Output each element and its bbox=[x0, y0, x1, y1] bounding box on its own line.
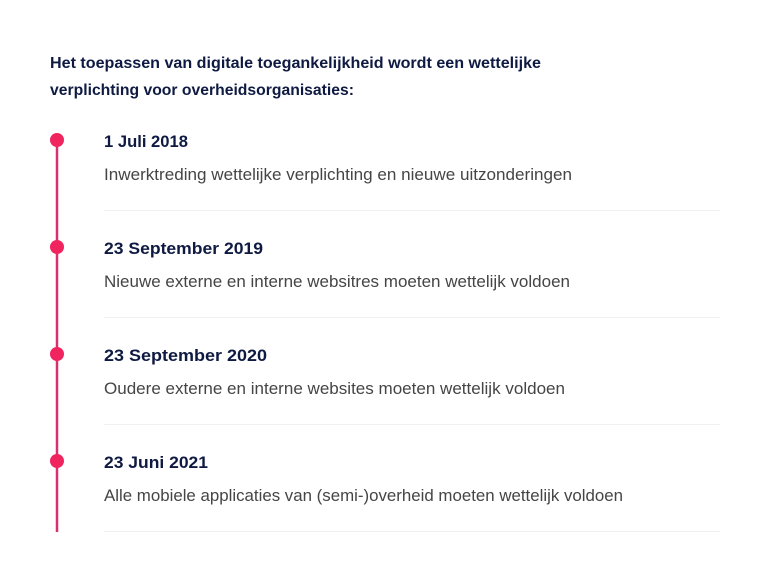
milestone: 1 Juli 2018 bbox=[50, 133, 720, 211]
marker dot bbox=[50, 347, 64, 361]
milestone: 23 Juni 2021 bbox=[50, 454, 720, 532]
timeline line bbox=[56, 140, 58, 532]
title: verplichting voor overheidsorganisaties: bbox=[50, 82, 354, 99]
milestone: 23 September 2019 bbox=[50, 240, 720, 318]
title bbox=[50, 55, 541, 99]
date: 23 September 2020 bbox=[104, 347, 267, 365]
title: Het toepassen van digitale toegankelijkheid wordt een wettelijke bbox=[50, 55, 541, 72]
description: Nieuwe externe en interne websitres moeten wettelijk voldoen bbox=[104, 273, 570, 291]
description: Oudere externe en interne websites moeten wettelijk voldoen bbox=[104, 380, 565, 398]
milestone: 23 September 2020 bbox=[50, 347, 720, 425]
date: 23 September 2019 bbox=[104, 240, 263, 258]
marker dot bbox=[50, 133, 64, 147]
description: Alle mobiele applicaties van (semi-)overheid moeten wettelijk voldoen bbox=[104, 487, 623, 505]
description: Inwerktreding wettelijke verplichting en nieuwe uitzonderingen bbox=[104, 166, 572, 184]
marker dot bbox=[50, 240, 64, 254]
date: 1 Juli 2018 bbox=[104, 133, 188, 151]
date: 23 Juni 2021 bbox=[104, 454, 208, 472]
marker dot bbox=[50, 454, 64, 468]
